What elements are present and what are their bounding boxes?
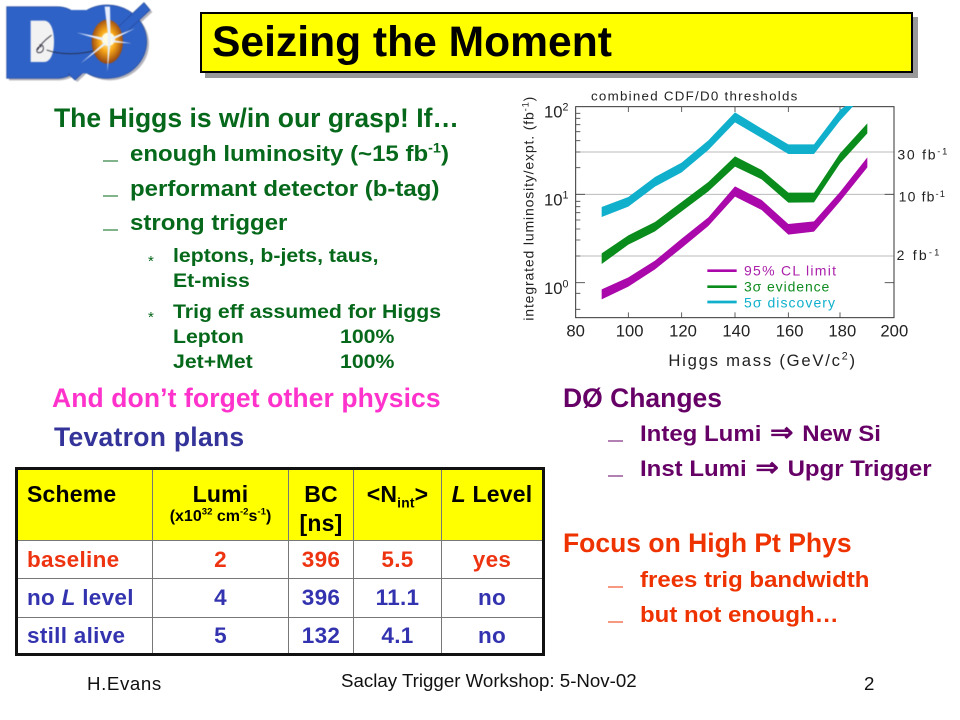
table: Tevatron schemes: 4: [214, 585, 227, 610]
y axis labels: 2: [563, 102, 569, 114]
table: Tevatron schemes: <Nint>: [367, 481, 428, 511]
jet met label: Jet+Met: [173, 351, 253, 373]
heading: DØ Changes: [563, 383, 722, 413]
x axis title: ): [849, 351, 855, 370]
title text: Seizing the Moment: [212, 18, 612, 66]
y axis title: integrated luminosity/expt. (fb: [520, 112, 536, 321]
lepton label: Lepton: [173, 326, 244, 348]
star: *: [148, 253, 154, 270]
bullet: integrated luminosity: Integ Lumi ⇒ New Si: [640, 417, 881, 447]
threshold labels: -1: [936, 189, 945, 199]
y axis labels: 1: [563, 190, 569, 202]
sub-bullet: objects: leptons, b-jets, taus,: [173, 245, 378, 267]
dash: —: [103, 152, 118, 169]
dash: —: [608, 432, 623, 449]
table: Tevatron schemes: yes: [473, 547, 511, 572]
table: Tevatron schemes: (x1032 cm-2s-1): [170, 507, 271, 525]
table: Tevatron schemes: 5: [214, 623, 227, 648]
curve: 5 sigma discovery: [602, 106, 853, 217]
table: Tevatron schemes: 396: [302, 585, 340, 610]
table: Tevatron schemes: no: [478, 623, 506, 648]
dash: —: [608, 578, 623, 595]
curve: 95 percent limit: [602, 157, 867, 299]
x axis labels: 160: [776, 322, 804, 341]
legend: 5σ discovery: [744, 295, 835, 311]
sub-bullet continuation: Et-miss: [173, 270, 250, 292]
threshold labels: -1: [929, 247, 939, 257]
y axis labels: 10: [544, 102, 563, 121]
y axis title: ): [520, 97, 536, 101]
legend: [707, 263, 836, 311]
footer: author: H.Evans: [87, 673, 162, 694]
table: Tevatron schemes: no: [478, 585, 506, 610]
panel: Higgs requirements: [54, 103, 459, 373]
curve: 3 sigma evidence: [602, 123, 867, 264]
panel: DØ changes: [563, 383, 932, 484]
bullet: trigger: strong trigger: [130, 210, 287, 235]
table: Tevatron schemes: 11.1: [376, 585, 419, 610]
bullet: instantaneous luminosity: Inst Lumi ⇒ Upgr Trigger: [640, 452, 932, 482]
x axis labels: 180: [828, 322, 856, 341]
threshold labels: 10 fb: [899, 189, 934, 205]
heading: The Higgs is w/in our grasp! If…: [54, 103, 459, 133]
table: Tevatron schemes: Lumi: [193, 481, 248, 507]
title shadow: [205, 17, 918, 78]
bullet: detector: performant detector (b-tag): [130, 176, 439, 201]
star: *: [148, 309, 154, 326]
table: Tevatron schemes: 2: [214, 547, 227, 572]
x axis labels: 120: [669, 322, 697, 341]
table: Tevatron schemes: 5.5: [381, 547, 414, 572]
table: Tevatron schemes: no L level: [27, 585, 134, 610]
dash: —: [608, 467, 623, 484]
threshold labels: 30 fb: [897, 146, 936, 162]
table: Tevatron schemes: 4.1: [381, 623, 414, 648]
bullet: bandwidth: frees trig bandwidth: [640, 567, 869, 592]
x axis title: 2: [842, 350, 848, 362]
y axis labels: [544, 102, 569, 298]
dash: —: [103, 187, 118, 204]
y axis labels: 10: [544, 279, 563, 298]
table: Tevatron schemes: 396: [302, 547, 340, 572]
threshold labels: 2 fb: [897, 247, 927, 263]
bullet: luminosity: enough luminosity (~15 fb-1): [130, 140, 449, 166]
table: Tevatron schemes: [15, 467, 545, 656]
threshold labels: [897, 146, 947, 263]
chart title: combined CDF/D0 thresholds: [591, 89, 798, 104]
heading: other physics: And don’t forget other physics: [52, 383, 441, 413]
table: Tevatron schemes: L Level: [452, 481, 532, 507]
x axis labels: 80: [566, 322, 585, 341]
footer: workshop: Saclay Trigger Workshop: 5-Nov-02: [341, 670, 637, 691]
table: Tevatron schemes: still alive: [27, 623, 125, 648]
dash: —: [103, 221, 118, 238]
title banner: [200, 12, 918, 78]
plot frame: [576, 107, 894, 318]
dash: —: [608, 613, 623, 630]
footer: page number: 2: [864, 673, 874, 694]
heading: Focus on High Pt Phys: [563, 528, 852, 558]
threshold labels: -1: [937, 147, 947, 157]
bullet: not enough: but not enough…: [640, 602, 839, 627]
table: Tevatron schemes: Scheme: [27, 481, 116, 507]
table: Tevatron schemes: [ns]: [300, 510, 342, 536]
x axis labels: 100: [616, 322, 644, 341]
legend: 3σ evidence: [744, 279, 830, 295]
y axis labels: 10: [544, 190, 563, 209]
title box: [200, 12, 913, 73]
table: Tevatron schemes: BC: [304, 481, 338, 507]
x axis title: Higgs mass (GeV/c: [668, 351, 840, 370]
lepton value: 100%: [340, 326, 394, 348]
y axis title: -1: [521, 102, 531, 111]
x axis labels: [566, 322, 908, 341]
y axis labels: 0: [563, 278, 569, 290]
sub-bullet: trigger efficiency: Trig eff assumed for Higgs: [173, 301, 441, 323]
table: Tevatron schemes: baseline: [27, 547, 119, 572]
jet met value: 100%: [340, 351, 394, 373]
logo: DØ experiment: [6, 2, 152, 82]
heading: Tevatron plans: Tevatron plans: [54, 422, 244, 452]
x axis labels: 200: [880, 322, 908, 341]
panel: high pt physics: [563, 528, 869, 630]
chart: Higgs luminosity thresholds: [520, 89, 947, 370]
x axis labels: 140: [722, 322, 750, 341]
table: Tevatron schemes: 132: [302, 623, 340, 648]
legend: 95% CL limit: [744, 263, 836, 279]
